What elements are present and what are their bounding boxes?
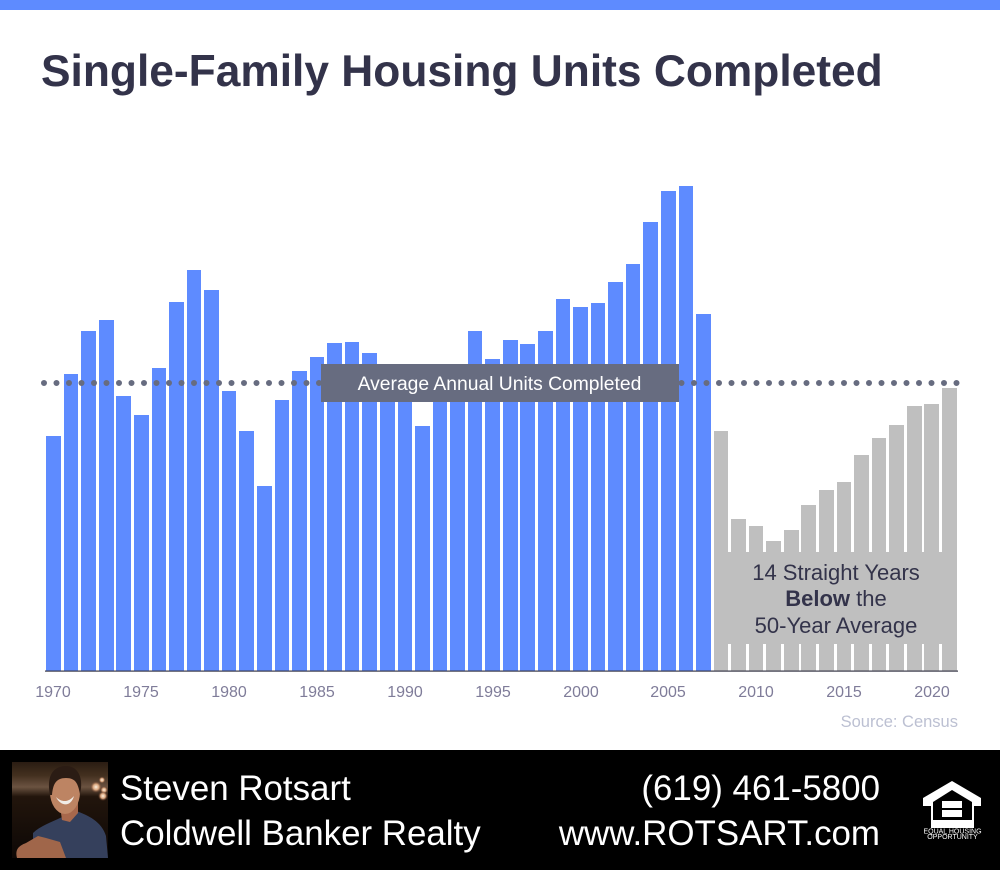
x axis labels: 1970 [35,684,71,701]
x axis labels: 1995 [475,684,511,701]
x axis labels: 2010 [738,684,774,701]
average label [321,364,679,402]
x axis labels: 2000 [563,684,599,701]
x axis labels: 2015 [826,684,862,701]
phone and website: (619) 461-5800 [641,769,880,808]
callout: 14 straight years: Below the [785,586,887,611]
source: Source: Census [841,713,958,731]
x axis labels: 1985 [299,684,335,701]
x axis labels: 1980 [211,684,247,701]
title: Single-Family Housing Units Completed [41,47,883,96]
footer band [0,750,1000,870]
phone and website: www.ROTSART.com [558,814,880,853]
agent name and company: Steven Rotsart [120,769,351,808]
callout: 14 straight years: 14 Straight Years [752,560,920,585]
bar chart [45,186,958,672]
x axis labels: 1990 [387,684,423,701]
agent photo [12,762,108,858]
icon: equal housing opportunity [923,781,982,841]
icon: equal housing opportunity: EQUAL HOUSING [923,828,982,836]
agent name and company: Coldwell Banker Realty [120,814,481,853]
callout: 14 straight years: 50-Year Average [755,613,917,638]
x axis labels [35,684,950,701]
x axis labels: 2005 [650,684,686,701]
x axis labels: 2020 [914,684,950,701]
x axis labels: 1975 [123,684,159,701]
top accent bar [0,0,1000,10]
average line (dotted) [44,380,957,386]
callout: 14 straight years [714,552,957,644]
blue bars: 1970 to 2007 [46,186,711,671]
grey bars: 2008 to 2021 [714,388,957,671]
x axis line [45,670,958,672]
icon: equal housing opportunity: OPPORTUNITY [927,834,978,841]
average label: Average Annual Units Completed [358,374,641,395]
